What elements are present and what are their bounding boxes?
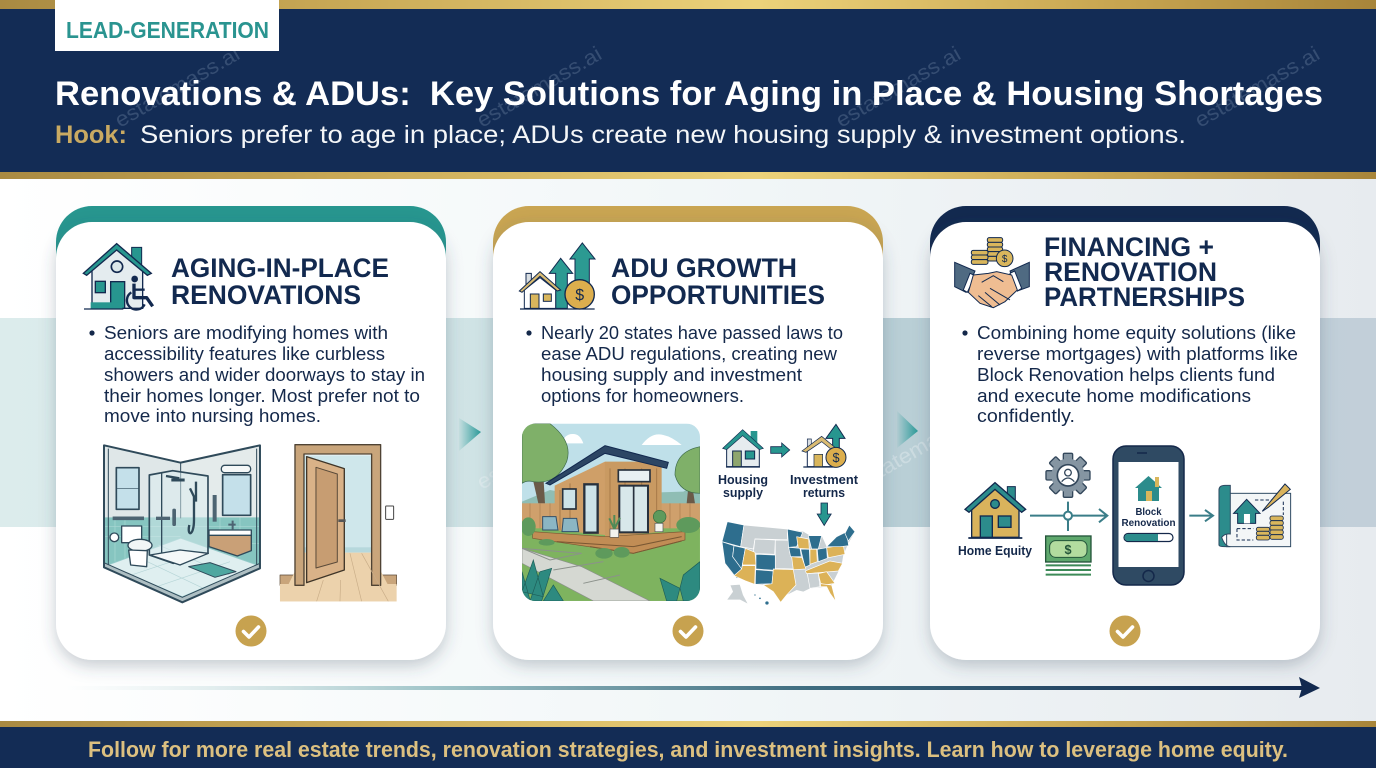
footer call to action: Follow for more real estate trends, renovation strategies, and investment insights. Learn how to leverage home equity.	[88, 737, 1288, 762]
body text	[962, 323, 1298, 426]
body text: options for homeowners.	[541, 386, 744, 406]
heading: AGING-IN-PLACE	[171, 253, 389, 283]
label: housing supply: Housing	[718, 472, 768, 487]
heading: RENOVATIONS	[171, 280, 361, 310]
icon: house and growth arrows	[519, 243, 595, 309]
icon: check badge	[236, 616, 266, 646]
body text: and execute home modifications	[977, 386, 1251, 406]
icon: check badge	[1110, 616, 1140, 646]
body text: showers and wider doorways to stay in	[104, 365, 425, 385]
body text: Combining home equity solutions (like	[977, 323, 1296, 343]
body text: housing supply and investment	[541, 365, 802, 385]
header banner	[0, 0, 1376, 179]
icon: handshake and coins: $	[1002, 254, 1008, 265]
icon: supply house	[723, 430, 763, 467]
header banner: estatemass.ai	[473, 42, 606, 132]
background band	[0, 318, 1376, 527]
icon: returns house	[802, 424, 846, 467]
icon: cash stack: $	[1064, 543, 1072, 557]
heading: FINANCING +	[1044, 232, 1214, 262]
header banner: estatemass.ai	[832, 42, 965, 132]
heading: OPPORTUNITIES	[611, 280, 825, 310]
arrow: panel 2 to panel 3	[897, 411, 918, 448]
hook line: Hook:	[55, 121, 127, 149]
panel: aging-in-place renovations	[56, 206, 446, 660]
body text: Nearly 20 states have passed laws to	[541, 323, 843, 343]
header banner: estatemass.ai	[1191, 42, 1324, 132]
icon: phone app Block Renovation	[1113, 446, 1184, 585]
icon: house and growth arrows: $	[575, 287, 584, 304]
diagram: housing supply to returns	[718, 424, 859, 605]
label: housing supply: supply	[723, 485, 764, 500]
page background	[0, 178, 1376, 722]
heading: RENOVATION	[1044, 257, 1217, 287]
arrow: returns to map	[817, 503, 831, 526]
icon: phone app Block Renovation: Renovation	[1122, 517, 1176, 529]
background band: estatemass.ai	[851, 404, 984, 494]
body text: their homes longer. Most prefer not to	[104, 386, 420, 406]
category tag: LEAD-GENERATION	[66, 17, 269, 43]
panel: financing and renovation partnerships	[930, 206, 1320, 660]
illustration: accessible bathroom	[104, 445, 397, 602]
hook line: Seniors prefer to age in place; ADUs create new housing supply & investment options.	[140, 121, 1186, 149]
body text: reverse mortgages) with platforms like	[977, 344, 1298, 364]
body text: confidently.	[977, 406, 1075, 426]
icon: phone app Block Renovation: Block	[1136, 506, 1162, 518]
header banner: estatemass.ai	[111, 42, 244, 132]
map: US states	[722, 522, 855, 605]
background band: estatemass.ai	[473, 404, 606, 494]
body text	[526, 323, 843, 406]
label: investment returns	[790, 472, 859, 500]
label: home equity: Home Equity	[958, 543, 1033, 558]
heading	[611, 253, 825, 310]
body text: move into nursing homes.	[104, 406, 321, 426]
body text: Seniors are modifying homes with	[104, 323, 388, 343]
icon: check badge	[672, 616, 704, 646]
diagram: financing flow	[958, 446, 1291, 585]
icon: returns house: $	[832, 451, 839, 465]
icon: house with wheelchair	[83, 244, 153, 310]
body text: ease ADU regulations, creating new	[541, 344, 838, 364]
icon: blueprint with pencil and coins	[1219, 484, 1291, 547]
label: investment returns: returns	[803, 485, 845, 500]
title: Renovations & ADUs: Key Solutions for Aging in Place & Housing Shortages	[55, 75, 1323, 113]
arrow: panel 1 to panel 2	[459, 418, 481, 451]
category tag	[55, 0, 279, 51]
arrow: supply to returns	[771, 443, 790, 457]
footer banner	[0, 721, 1376, 768]
heading: ADU GROWTH	[611, 253, 797, 283]
body text	[89, 323, 425, 426]
icon: cash stack	[1046, 536, 1091, 575]
icon: home equity house	[965, 483, 1026, 538]
arrow: progress timeline	[65, 677, 1320, 698]
body text: accessibility features like curbless	[104, 344, 385, 364]
heading	[171, 253, 389, 310]
heading: PARTNERSHIPS	[1044, 282, 1245, 312]
connector lines	[1030, 502, 1213, 531]
panel: ADU growth opportunities	[493, 206, 883, 660]
illustration: backyard ADU	[521, 424, 700, 601]
icon: gear	[1046, 453, 1090, 497]
body text: Block Renovation helps clients fund	[977, 365, 1275, 385]
label: housing supply	[718, 472, 768, 500]
label: investment returns: Investment	[790, 472, 859, 487]
heading	[1044, 232, 1245, 312]
icon: handshake and coins	[955, 238, 1029, 308]
